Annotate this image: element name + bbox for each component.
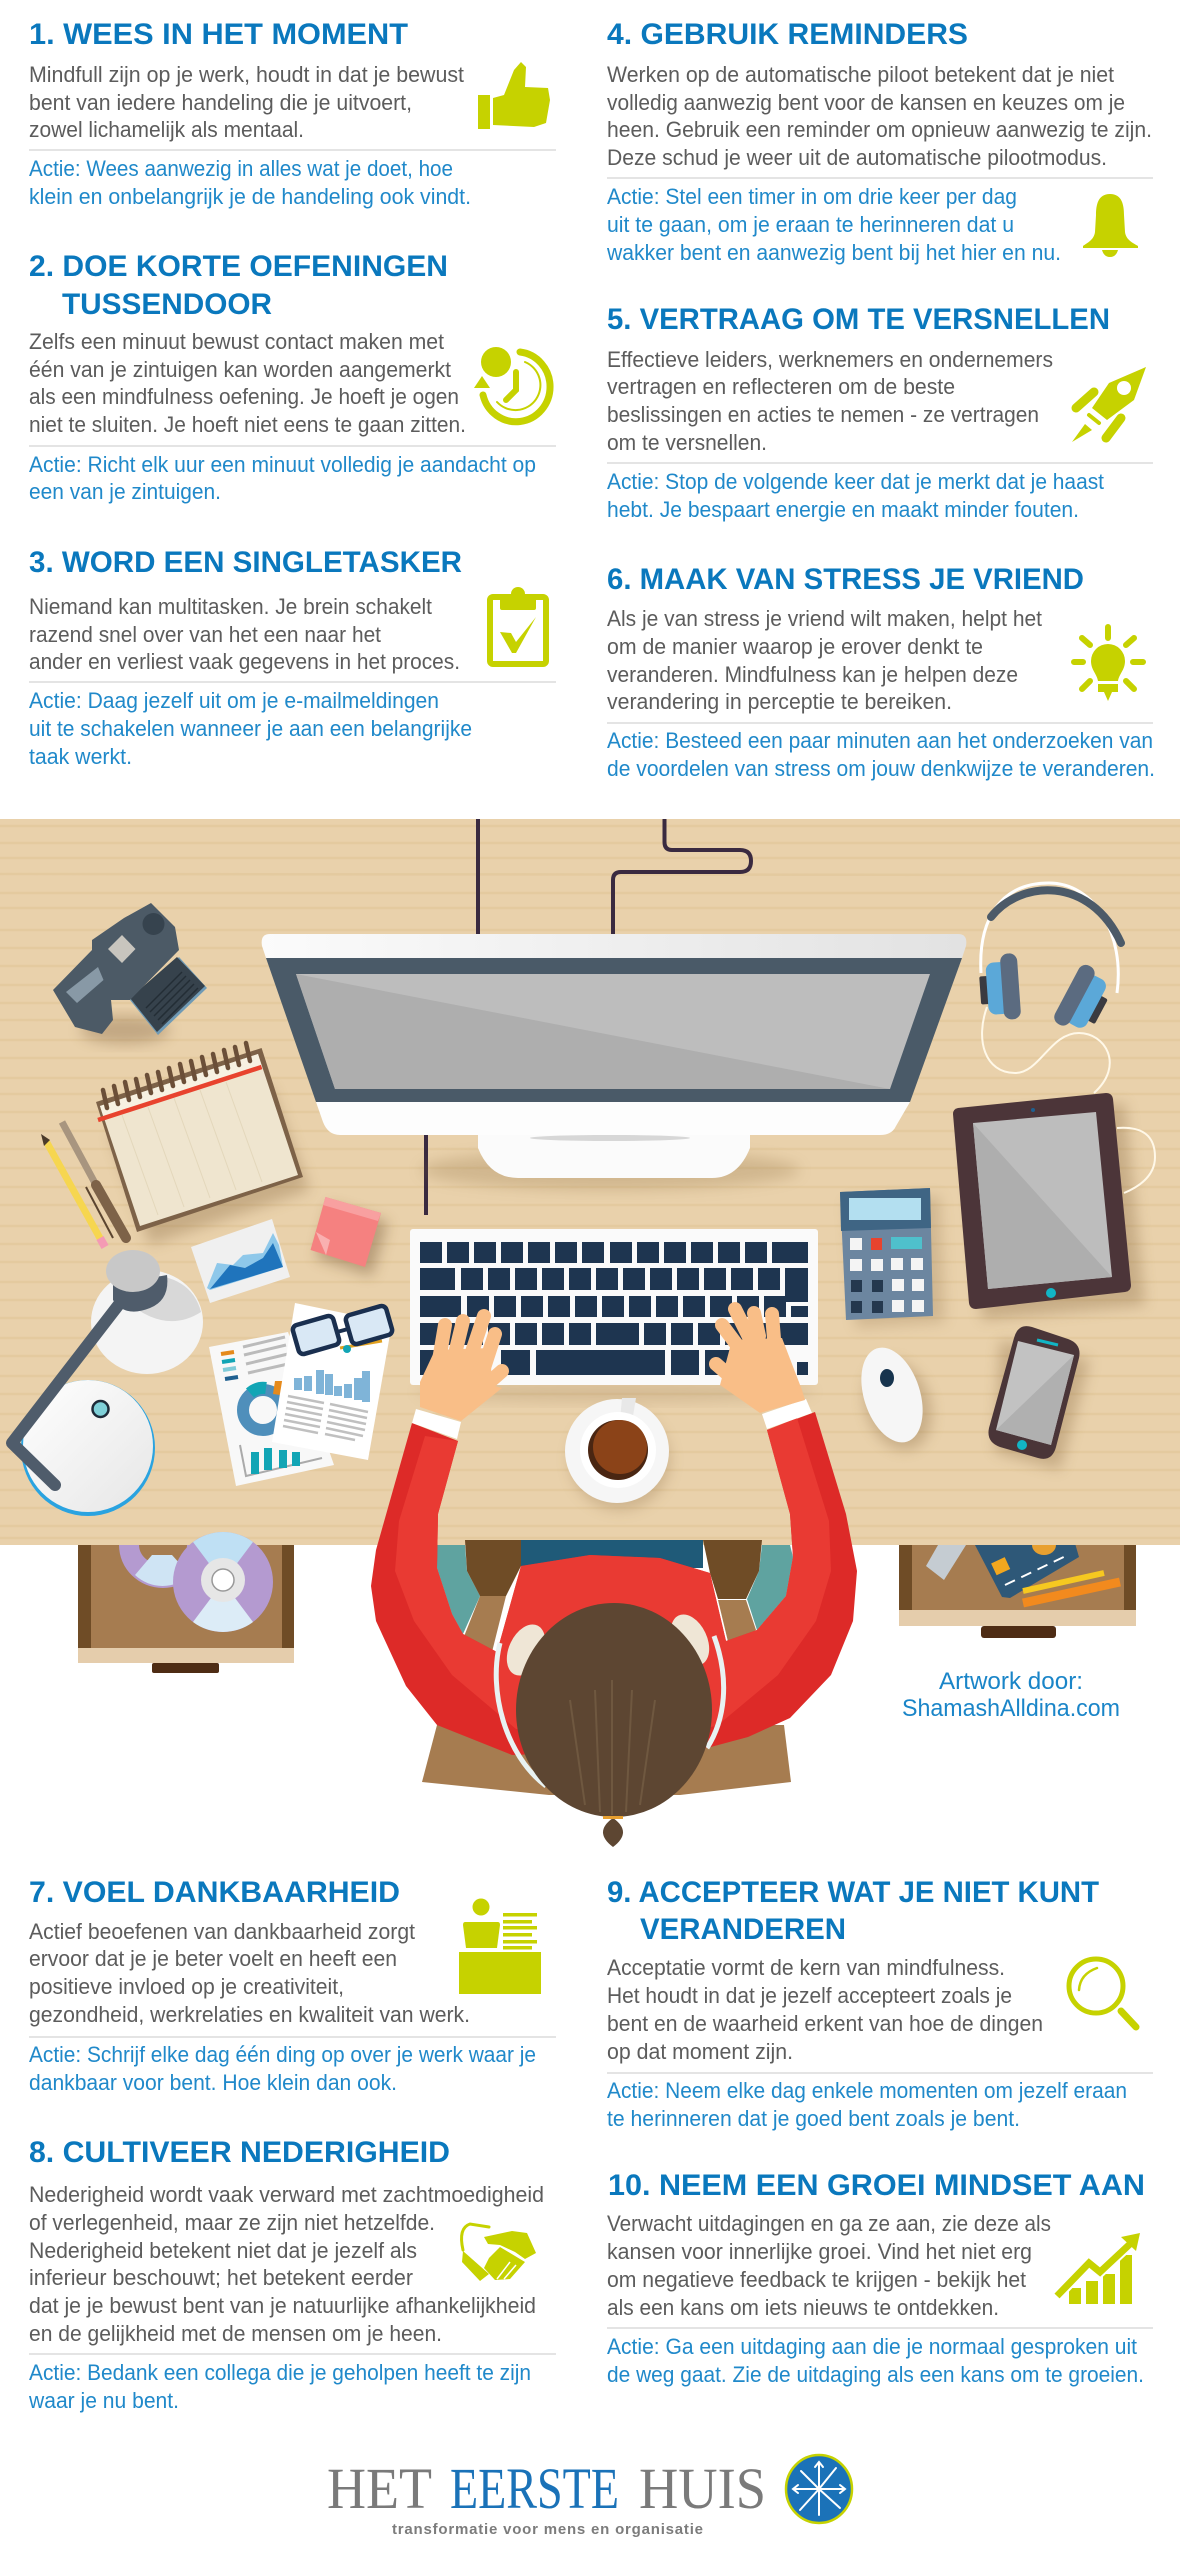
keyboard <box>410 1229 818 1402</box>
panel: tip 9 <box>607 1876 1153 2131</box>
right drawer <box>899 1545 1136 1638</box>
logo wordmark: HET <box>327 2456 432 2521</box>
tablet <box>953 1093 1155 1320</box>
credit card <box>975 1545 1079 1598</box>
text block: tip 6 body: om de manier waarop je erover denkt te <box>607 634 983 659</box>
text block: tip 5 body <box>607 347 1053 455</box>
text block: tip 6 action: de voordelen van stress om jouw denkwijze te veranderen. <box>607 756 1155 781</box>
logo wordmark <box>327 2456 766 2521</box>
text block: tip 10 body: kansen voor innerlijke groei. Vind het niet erg <box>607 2239 1032 2264</box>
text block: tip 9 body: Acceptatie vormt de kern van mindfulness. <box>607 1955 1005 1980</box>
camera <box>53 903 207 1044</box>
text block: tip 7 body: gezondheid, werkrelaties en kwaliteit van werk. <box>29 2002 470 2027</box>
text block: tip 4 body: volledig aanwezig bent voor de kansen en keuzes om je <box>607 90 1125 115</box>
text block: tip 8 body <box>29 2182 544 2346</box>
icon: magnifying glass <box>1069 1959 1136 2027</box>
phone <box>988 1326 1090 1470</box>
text block: tip 6 body: veranderen. Mindfulness kan je helpen deze <box>607 662 1018 687</box>
text block: tip 9 action: te herinneren dat je goed bent zoals je bent. <box>607 2106 1020 2131</box>
text block: tip 2 body: één van je zintuigen kan worden aangemerkt <box>29 357 451 382</box>
icon: light bulb <box>1074 627 1143 701</box>
text block: tip 7 action: dankbaar voor bent. Hoe klein dan ook. <box>29 2070 397 2095</box>
notebook <box>96 1043 310 1245</box>
pen <box>62 1122 126 1238</box>
left drawer <box>78 1532 294 1673</box>
logo wordmark: HUIS <box>639 2456 766 2521</box>
panel: tip 10 <box>607 2169 1153 2387</box>
text block: tip 4 body <box>607 62 1152 170</box>
text block: tip 7 body: positieve invloed op je creativiteit, <box>29 1974 344 1999</box>
text block: tip 1 body: bent van iedere handeling die je uitvoert, <box>29 90 412 115</box>
text block: tip 3 body: razend snel over van het een naar het <box>29 622 381 647</box>
calculator <box>840 1188 945 1328</box>
heading: tip 9 <box>607 1876 1099 1946</box>
text block: tip 9 body: op dat moment zijn. <box>607 2039 793 2064</box>
text block: tip 5 body: om te versnellen. <box>607 430 767 455</box>
logo emblem <box>786 2455 852 2523</box>
panel: tip 3 <box>29 546 556 769</box>
text block: tip 2 action <box>29 452 536 504</box>
text block: tip 5 action <box>607 469 1104 522</box>
text block: tip 9 body <box>607 1955 1043 2064</box>
text block: tip 8 body: Nederigheid wordt vaak verward met zachtmoedigheid <box>29 2182 544 2207</box>
heading: tip 1: 1. WEES IN HET MOMENT <box>29 18 408 51</box>
icon: person at desk <box>459 1898 541 1994</box>
heading: tip 2 <box>29 250 448 321</box>
panel: tip 4 <box>606 18 1153 265</box>
person: head and headphones <box>496 1603 724 1847</box>
headphones <box>978 883 1121 1093</box>
text block: tip 3 action <box>29 688 472 769</box>
text block: tip 7 action: Actie: Schrijf elke dag één ding op over je werk waar je <box>29 2042 536 2067</box>
text block: tip 2 body <box>29 329 466 437</box>
text block: tip 8 body: dat je je bewust bent van je natuurlijke afhankelijkheid <box>29 2293 536 2318</box>
chart card <box>191 1219 290 1303</box>
text block: tip 10 action <box>607 2334 1144 2387</box>
text block: tip 6 body: Als je van stress je vriend wilt maken, helpt het <box>607 606 1042 631</box>
text block: tip 2 body: Zelfs een minuut bewust contact maken met <box>29 329 444 354</box>
panel: tip 1 <box>29 18 556 209</box>
icon: thumbs up <box>478 62 550 129</box>
desk surface <box>0 819 1180 1545</box>
panel: tip 8 <box>28 2136 556 2413</box>
text block: tip 8 action <box>28 2360 531 2413</box>
text block: tip 7 body: ervoor dat je je beter voelt en heeft een <box>29 1946 397 1971</box>
text block: tip 9 body: bent en de waarheid erkent van hoe de dingen <box>607 2011 1043 2036</box>
heading: tip 7: 7. VOEL DANKBAARHEID <box>29 1876 400 1909</box>
text block: tip 10 action: Actie: Ga een uitdaging aan die je normaal gesproken uit <box>607 2334 1137 2359</box>
text block: tip 6 body: verandering in perceptie te bereiken. <box>607 689 952 714</box>
heading: tip 4: 4. GEBRUIK REMINDERS <box>607 18 968 51</box>
USB stick <box>926 1545 966 1580</box>
desk lamp <box>12 1250 203 1516</box>
papers with charts <box>209 1303 393 1486</box>
text block: tip 3 body: ander en verliest vaak gegevens in het proces. <box>29 649 460 674</box>
heading: tip 9: 9. ACCEPTEER WAT JE NIET KUNT <box>607 1876 1099 1909</box>
text block: tip 3 body: Niemand kan multitasken. Je brein schakelt <box>29 594 432 619</box>
text block: tip 2 action: een van je zintuigen. <box>29 479 221 504</box>
heading: tip 2: TUSSENDOOR <box>62 288 272 321</box>
pencil <box>41 1134 105 1247</box>
text block: artwork credit: ShamashAlldina.com <box>902 1695 1120 1722</box>
pencils <box>1023 1573 1120 1603</box>
logo tagline: transformatie voor mens en organisatie <box>392 2521 703 2538</box>
text block: tip 4 action: wakker bent en aanwezig bent bij het hier en nu. <box>606 240 1061 265</box>
text block: tip 6 action: Actie: Besteed een paar minuten aan het onderzoeken van <box>607 728 1153 753</box>
icon: clock <box>474 347 550 422</box>
text block: tip 4 action: Actie: Stel een timer in om drie keer per dag <box>607 184 1017 209</box>
text block: tip 4 body: heen. Gebruik een reminder om opnieuw aanwezig te zijn. <box>607 117 1152 142</box>
text block: tip 4 body: Deze schud je weer uit de automatische pilootmodus. <box>607 145 1107 170</box>
logo: Het Eerste Huis <box>327 2455 852 2538</box>
icon: growth chart <box>1057 2233 1140 2304</box>
heading: tip 8: 8. CULTIVEER NEDERIGHEID <box>29 2136 450 2169</box>
text block: tip 10 body: als een kans om iets nieuws te ontdekken. <box>607 2295 999 2320</box>
text block: tip 3 body <box>29 594 460 674</box>
person: hands and cuffs <box>412 1309 812 1439</box>
text block: artwork credit <box>902 1668 1120 1722</box>
text block: tip 5 action: Actie: Stop de volgende keer dat je merkt dat je haast <box>607 469 1104 494</box>
heading: tip 9: VERANDEREN <box>640 1913 846 1946</box>
text block: tip 1 body <box>29 62 464 142</box>
text block: tip 8 body: Nederigheid betekent niet dat je jezelf als <box>29 2238 417 2263</box>
text block: tip 1 action: klein en onbelangrijk je de handeling ook vindt. <box>29 184 471 209</box>
text block: tip 8 body: of verlegenheid, maar ze zijn niet hetzelfde. <box>29 2210 435 2235</box>
text block: tip 5 action: hebt. Je bespaart energie en maakt minder fouten. <box>607 497 1079 522</box>
panel: tip 5 <box>607 303 1153 522</box>
text block: tip 2 body: niet te sluiten. Je hoeft niet eens te gaan zitten. <box>29 412 466 437</box>
monitor <box>262 934 966 1190</box>
text block: tip 1 body: zowel lichamelijk als mentaal. <box>29 117 304 142</box>
text block: tip 4 action <box>606 184 1061 265</box>
text block: tip 10 body <box>607 2211 1051 2320</box>
text block: tip 9 body: Het houdt in dat je jezelf accepteert zoals je <box>607 1983 1012 2008</box>
text block: tip 5 body: vertragen en reflecteren om de beste <box>607 374 955 399</box>
text block: tip 10 action: de weg gaat. Zie de uitdaging als een kans om te groeien. <box>607 2362 1144 2387</box>
text block: tip 4 action: uit te gaan, om je eraan te herinneren dat u <box>607 212 1014 237</box>
text block: tip 8 body: inferieur beschouwt; het betekent eerder <box>29 2265 413 2290</box>
heading: tip 10: 10. NEEM EEN GROEI MINDSET AAN <box>608 2169 1145 2202</box>
text block: tip 4 body: Werken op de automatische piloot betekent dat je niet <box>607 62 1114 87</box>
text block: tip 5 body: Effectieve leiders, werknemers en ondernemers <box>607 347 1053 372</box>
text block: artwork credit: Artwork door: <box>939 1668 1083 1695</box>
text block: tip 2 action: Actie: Richt elk uur een minuut volledig je aandacht op <box>29 452 536 477</box>
coffee cup <box>565 1398 670 1510</box>
icon: clipboard <box>490 587 546 664</box>
CDs <box>119 1532 273 1632</box>
heading: tip 2: 2. DOE KORTE OEFENINGEN <box>29 250 448 283</box>
icon: handshake <box>462 2224 536 2281</box>
icon: bell <box>1083 194 1138 257</box>
text block: tip 2 body: als een mindfulness oefening. Je hoeft je ogen <box>29 384 459 409</box>
text block: tip 1 action: Actie: Wees aanwezig in alles wat je doet, hoe <box>29 156 453 181</box>
sticky note <box>310 1197 388 1276</box>
text block: tip 7 action <box>29 2042 536 2095</box>
text block: tip 3 action: taak werkt. <box>29 744 132 769</box>
panel: tip 2 <box>29 250 556 504</box>
text block: tip 3 action: Actie: Daag jezelf uit om je e-mailmeldingen <box>29 688 439 713</box>
text block: tip 10 body: om negatieve feedback te krijgen - bekijk het <box>607 2267 1026 2292</box>
text block: tip 1 action <box>29 156 471 209</box>
text block: tip 7 body: Actief beoefenen van dankbaarheid zorgt <box>29 1919 415 1944</box>
chair back and teal seat <box>437 1540 793 1634</box>
text block: tip 6 action <box>607 728 1155 781</box>
text block: tip 7 body <box>29 1919 470 2027</box>
illustration: desk scene <box>0 819 1180 1847</box>
text block: tip 10 body: Verwacht uitdagingen en ga ze aan, zie deze als <box>607 2211 1051 2236</box>
heading: tip 5: 5. VERTRAAG OM TE VERSNELLEN <box>607 303 1110 336</box>
text block: tip 9 action: Actie: Neem elke dag enkele momenten om jezelf eraan <box>607 2078 1127 2103</box>
icon: rocket <box>1072 367 1146 442</box>
person: torso and arms <box>371 1412 857 1755</box>
mouse <box>850 1340 943 1459</box>
heading: tip 3: 3. WORD EEN SINGLETASKER <box>29 546 462 579</box>
text block: tip 8 action: waar je nu bent. <box>28 2388 179 2413</box>
text block: tip 5 body: beslissingen en acties te nemen - ze vertragen <box>607 402 1039 427</box>
chair <box>422 1596 791 1795</box>
text block: tip 1 body: Mindfull zijn op je werk, houdt in dat je bewust <box>29 62 464 87</box>
text block: tip 9 action <box>607 2078 1127 2131</box>
text block: tip 8 body: en de gelijkheid met de mensen om je heen. <box>29 2321 442 2346</box>
panel: tip 7 <box>29 1876 556 2095</box>
text block: tip 8 action: Actie: Bedank een collega die je geholpen heeft te zijn <box>29 2360 531 2385</box>
text block: tip 3 action: uit te schakelen wanneer je aan een belangrijke <box>29 716 472 741</box>
cables <box>426 819 751 1215</box>
heading: tip 6: 6. MAAK VAN STRESS JE VRIEND <box>607 563 1084 596</box>
logo wordmark: EERSTE <box>450 2456 619 2521</box>
text block: tip 6 body <box>607 606 1042 714</box>
panel: tip 6 <box>607 563 1155 781</box>
